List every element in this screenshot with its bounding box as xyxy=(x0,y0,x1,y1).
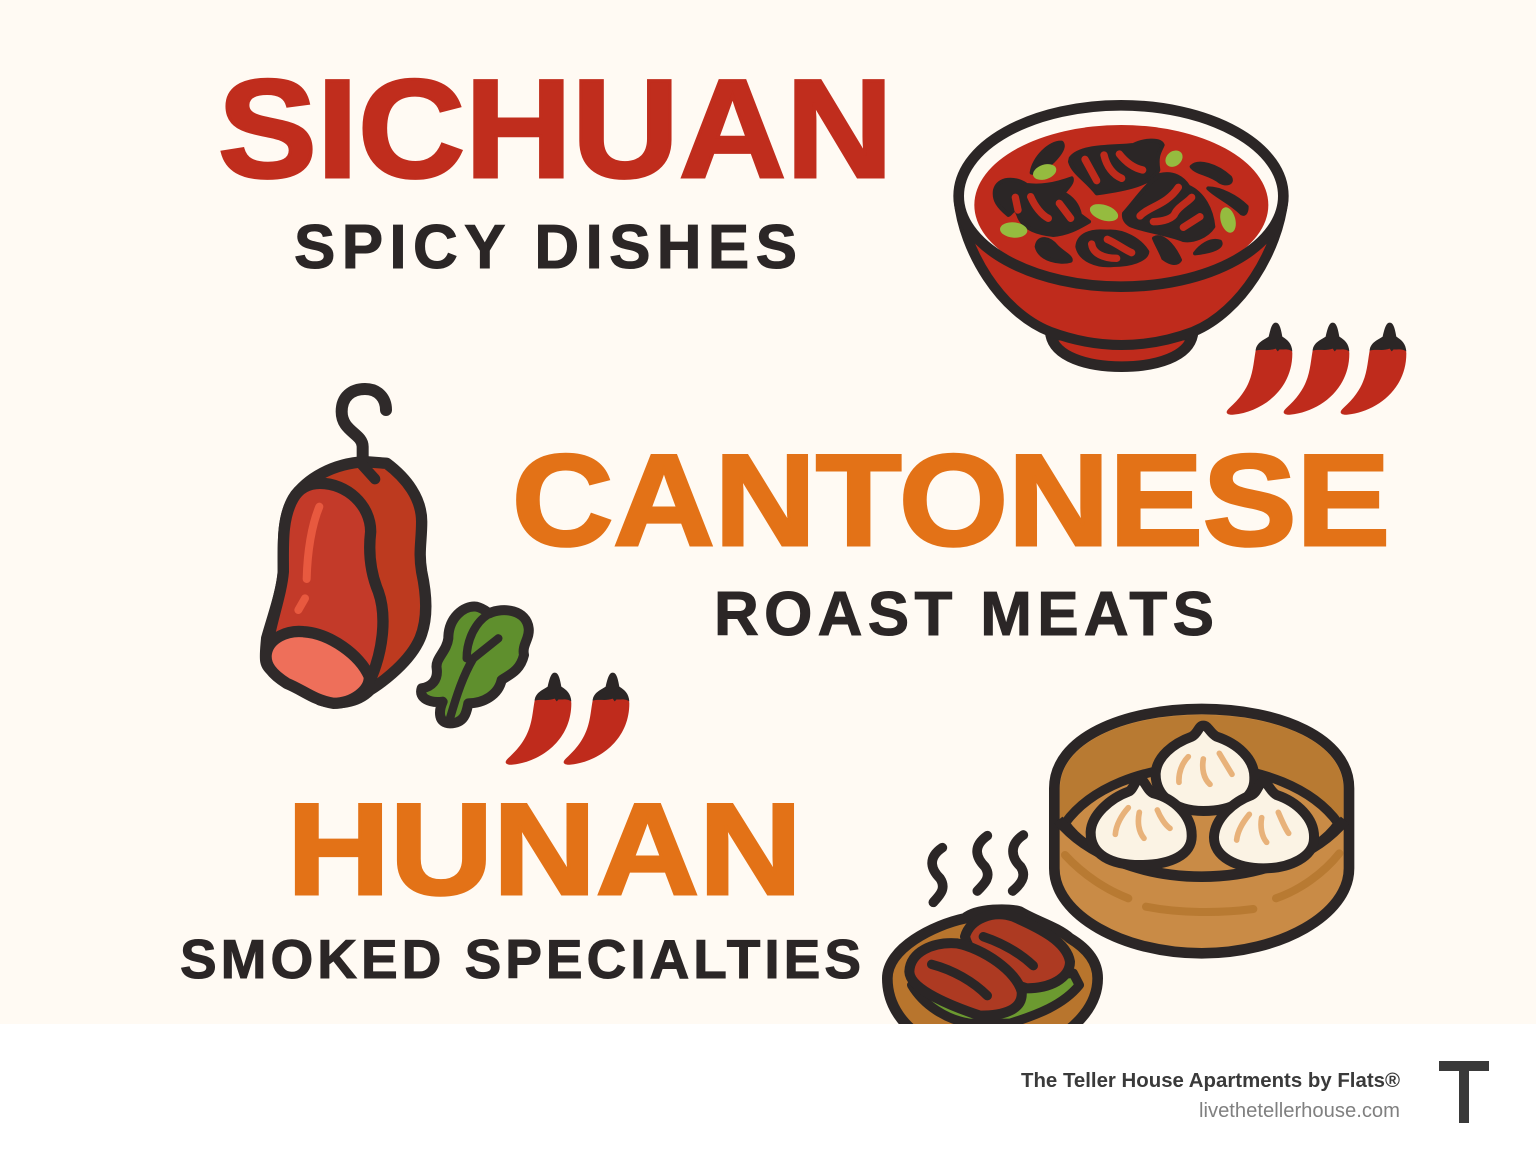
dumpling pleats xyxy=(1179,753,1232,784)
dumpling: top xyxy=(1156,726,1254,811)
icon: three chili peppers xyxy=(1227,323,1406,415)
chili 2 xyxy=(1284,323,1349,415)
soup xyxy=(974,125,1268,285)
bowl rim xyxy=(959,105,1283,287)
dumpling shell xyxy=(1156,726,1254,811)
highlights xyxy=(307,507,319,579)
icon: steam lines xyxy=(932,835,1023,902)
green peas xyxy=(999,147,1238,239)
heading: Cantonese: CANTONESE xyxy=(512,427,1390,573)
icon: two chili peppers xyxy=(506,673,629,765)
front meat slice xyxy=(909,943,1022,1016)
icon: bowl of spicy soup xyxy=(959,105,1283,367)
footer: brand name: The Teller House Apartments by Flats® xyxy=(1021,1070,1400,1092)
hook tie xyxy=(362,464,375,479)
leaf veins xyxy=(450,615,498,718)
bowl body xyxy=(959,200,1283,345)
meat highlights xyxy=(1015,154,1200,258)
footer band xyxy=(0,1024,1536,1154)
dumpling pleats xyxy=(1115,808,1170,838)
meat front xyxy=(269,483,383,677)
back meat slice xyxy=(965,914,1070,988)
dumpling pleats xyxy=(1237,812,1289,842)
chili 1 xyxy=(1227,323,1292,415)
subheading: roast meats: ROAST MEATS xyxy=(714,580,1214,649)
chili 1 xyxy=(506,673,571,765)
leaf blade xyxy=(421,607,529,723)
subheading: spicy dishes: SPICY DISHES xyxy=(294,213,797,282)
highlight spot xyxy=(298,598,305,610)
icon: plate of smoked meat xyxy=(887,910,1098,1042)
plate xyxy=(887,910,1098,1042)
meat pieces xyxy=(995,141,1247,265)
bowl foot xyxy=(1051,335,1193,367)
steamer bands xyxy=(1065,853,1339,912)
dumpling: left xyxy=(1091,778,1192,865)
hook xyxy=(342,389,386,462)
heading: Hunan: HUNAN xyxy=(287,776,802,922)
footer: website: livethetellerhouse.com xyxy=(1199,1100,1400,1122)
steamer interior wall xyxy=(1060,715,1343,877)
greens xyxy=(912,973,1079,1023)
bowl interior xyxy=(959,105,1283,287)
icon: green leaf xyxy=(421,607,529,723)
cut face xyxy=(266,631,369,703)
meat side xyxy=(265,462,426,703)
steamer floor xyxy=(1065,767,1338,877)
chili 2 xyxy=(564,673,629,765)
footer: T logo xyxy=(1439,1061,1489,1123)
heading: Sichuan: SICHUAN xyxy=(218,50,893,207)
icon: bamboo steamer with dumplings xyxy=(1054,709,1349,953)
subheading: smoked specialties: SMOKED SPECIALTIES xyxy=(180,928,861,990)
steamer body xyxy=(1054,709,1349,953)
dumpling shell xyxy=(1214,782,1314,868)
icon: roast meat on hook xyxy=(265,389,426,703)
steamer front rim xyxy=(1058,820,1345,877)
chili 3 xyxy=(1341,323,1406,415)
meat score lines xyxy=(932,937,1033,996)
dumpling: right xyxy=(1214,782,1314,868)
dumpling shell xyxy=(1091,778,1192,865)
